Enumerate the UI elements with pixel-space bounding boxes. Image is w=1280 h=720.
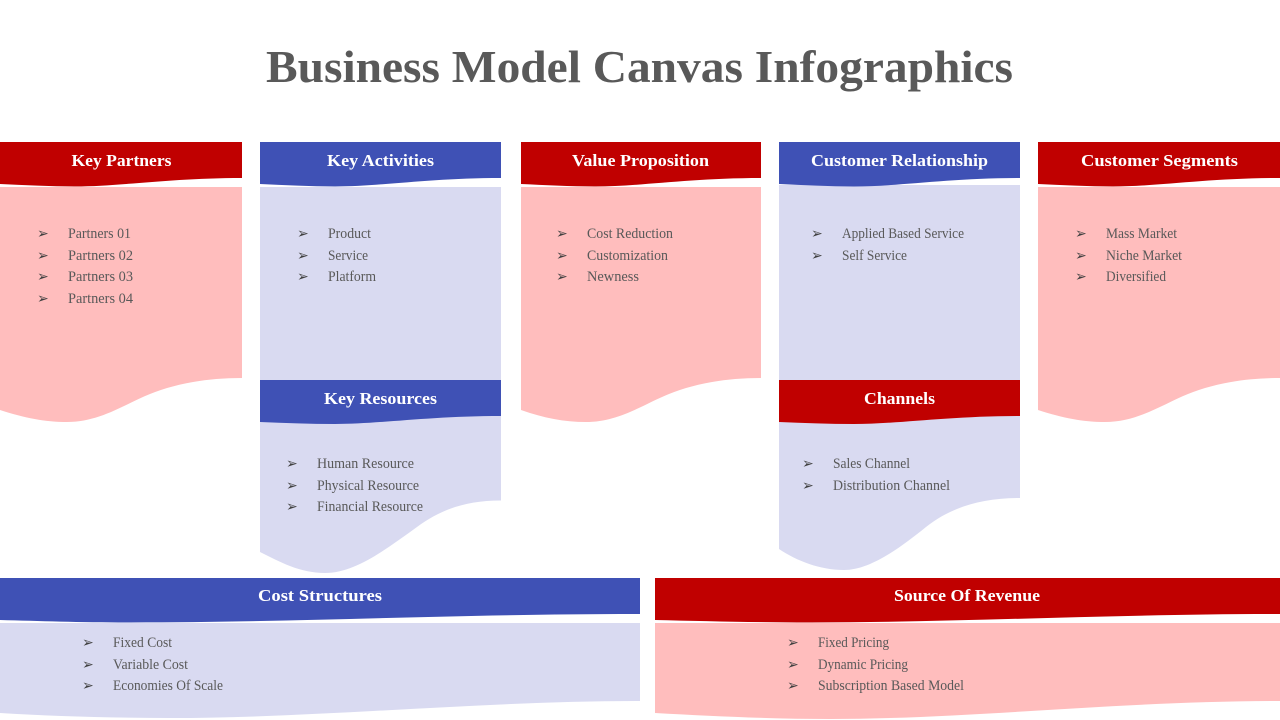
list: source of revenue xyxy=(787,635,964,694)
header: cost structures xyxy=(0,578,640,622)
list: customer segments: ➢ xyxy=(1075,269,1087,285)
list: key partners: Partners 03 xyxy=(68,269,133,285)
list: value proposition xyxy=(556,226,674,285)
panel: channels xyxy=(779,380,1020,570)
list: key partners: Partners 04 xyxy=(68,291,134,307)
body: source of revenue xyxy=(655,623,1280,719)
list: customer segments: Mass Market xyxy=(1106,226,1177,242)
list: value proposition: Customization xyxy=(587,248,669,264)
list: cost structures: ➢ xyxy=(82,678,94,694)
heading: value proposition: Value Proposition xyxy=(572,151,710,170)
list: key activities: ➢ xyxy=(297,226,309,242)
list: cost structures: Economies Of Scale xyxy=(113,678,223,694)
list: key resources: ➢ xyxy=(286,478,298,494)
list: source of revenue: Subscription Based Model xyxy=(818,678,964,694)
header: customer segments xyxy=(1038,142,1280,186)
body: customer relationship xyxy=(779,185,1020,381)
list: channels xyxy=(802,456,950,494)
list: customer segments: Diversified xyxy=(1106,269,1167,285)
heading: cost structures: Cost Structures xyxy=(258,586,382,605)
list: channels: Sales Channel xyxy=(833,456,910,472)
list: key activities: Platform xyxy=(328,269,377,285)
list: customer relationship: ➢ xyxy=(811,226,823,242)
list: value proposition: ➢ xyxy=(556,269,568,285)
list: cost structures: Variable Cost xyxy=(113,657,188,673)
heading: customer segments: Customer Segments xyxy=(1081,151,1238,170)
list: customer segments: Niche Market xyxy=(1106,248,1182,264)
list: customer relationship: Applied Based Service xyxy=(842,226,964,242)
list: cost structures: ➢ xyxy=(82,657,94,673)
list: value proposition: Newness xyxy=(587,269,639,285)
list: key resources: Human Resource xyxy=(317,456,414,472)
panel: key activities xyxy=(260,142,501,381)
list: customer relationship: ➢ xyxy=(811,248,823,264)
title: Business Model Canvas Infographics xyxy=(266,41,1013,92)
list: source of revenue: Fixed Pricing xyxy=(818,635,889,651)
list: key partners: ➢ xyxy=(37,226,49,242)
heading: key resources: Key Resources xyxy=(324,389,437,408)
body: channels xyxy=(779,415,1020,570)
list: customer segments: ➢ xyxy=(1075,226,1087,242)
panel: key partners xyxy=(0,142,242,422)
list: key resources xyxy=(286,456,423,515)
list: channels: ➢ xyxy=(802,456,814,472)
panel: key resources xyxy=(260,380,501,573)
list: key partners xyxy=(37,226,134,307)
body: value proposition xyxy=(521,187,761,422)
list: cost structures: ➢ xyxy=(82,635,94,651)
header: key partners xyxy=(0,142,242,186)
list: key partners: ➢ xyxy=(37,291,49,307)
list: key partners: ➢ xyxy=(37,248,49,264)
header: customer relationship xyxy=(779,142,1020,186)
list: key resources: ➢ xyxy=(286,456,298,472)
body: customer segments xyxy=(1038,187,1280,422)
heading: key activities: Key Activities xyxy=(327,151,434,170)
list: cost structures xyxy=(82,635,223,694)
list: value proposition: ➢ xyxy=(556,248,568,264)
list: source of revenue: ➢ xyxy=(787,635,799,651)
list: customer segments xyxy=(1075,226,1182,285)
header: value proposition xyxy=(521,142,761,186)
list: cost structures: Fixed Cost xyxy=(113,635,172,651)
list: customer relationship xyxy=(811,226,964,264)
header: key activities xyxy=(260,142,501,186)
list: source of revenue: Dynamic Pricing xyxy=(818,657,908,673)
list: key activities: Service xyxy=(328,248,368,264)
list: key activities: Product xyxy=(328,226,371,242)
body: key partners xyxy=(0,187,242,422)
panel: customer segments xyxy=(1038,142,1280,422)
list: key partners: Partners 02 xyxy=(68,248,133,264)
panel: source of revenue xyxy=(655,578,1280,719)
heading: key partners: Key Partners xyxy=(72,151,172,170)
list: key resources: ➢ xyxy=(286,499,298,515)
panel: cost structures xyxy=(0,578,640,718)
panel: customer relationship xyxy=(779,142,1020,381)
header: key resources xyxy=(260,380,501,424)
list: key activities: ➢ xyxy=(297,248,309,264)
list: customer segments: ➢ xyxy=(1075,248,1087,264)
heading: source of revenue: Source Of Revenue xyxy=(894,586,1040,605)
heading: channels: Channels xyxy=(864,389,935,408)
list: channels: Distribution Channel xyxy=(833,478,950,494)
body: cost structures xyxy=(0,623,640,718)
list: key resources: Physical Resource xyxy=(317,478,419,494)
list: key activities xyxy=(297,226,377,285)
body: key activities xyxy=(260,187,501,381)
header: source of revenue xyxy=(655,578,1280,622)
header: channels xyxy=(779,380,1020,424)
list: channels: ➢ xyxy=(802,478,814,494)
panel: value proposition xyxy=(521,142,761,422)
heading: customer relationship: Customer Relationship xyxy=(811,151,988,170)
list: customer relationship: Self Service xyxy=(842,248,907,264)
list: key partners: ➢ xyxy=(37,269,49,285)
list: value proposition: ➢ xyxy=(556,226,568,242)
list: key partners: Partners 01 xyxy=(68,226,131,242)
list: value proposition: Cost Reduction xyxy=(587,226,674,242)
body: key resources xyxy=(260,415,501,573)
list: key resources: Financial Resource xyxy=(317,499,423,515)
list: source of revenue: ➢ xyxy=(787,678,799,694)
list: source of revenue: ➢ xyxy=(787,657,799,673)
list: key activities: ➢ xyxy=(297,269,309,285)
